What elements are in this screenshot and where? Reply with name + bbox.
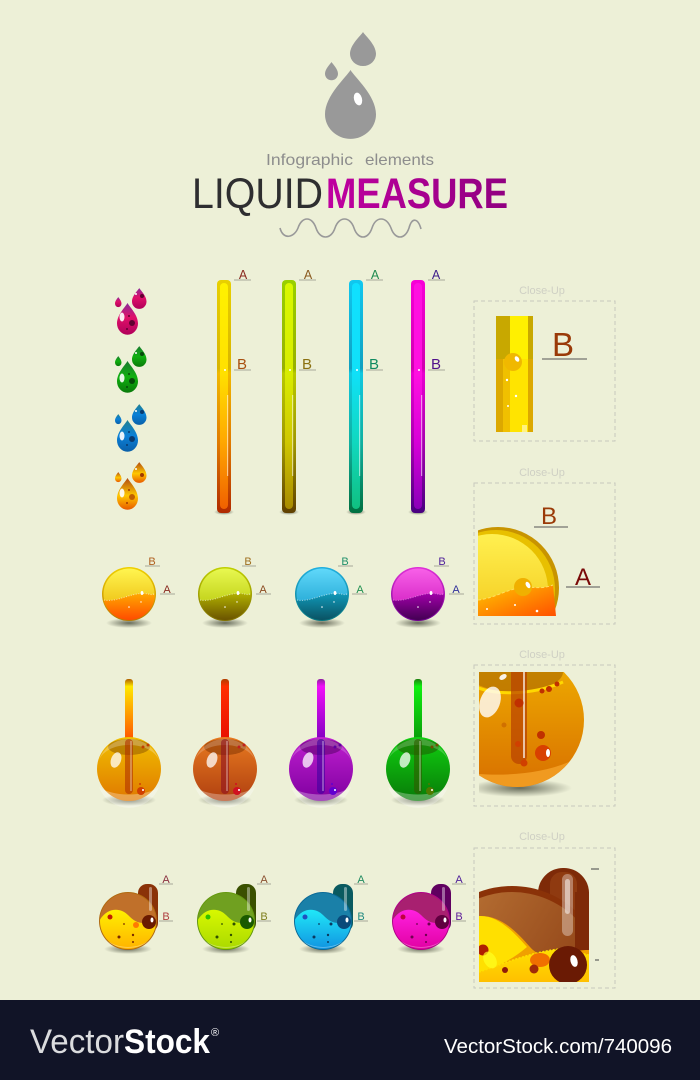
green drops [115,346,146,393]
sphere A and B labels, magenta: A [452,584,460,596]
flask labels, lime: B [260,911,268,923]
yellow sphere [102,567,156,628]
cyan tube: B [369,356,379,373]
sphere A and B labels, blue: A [356,584,364,596]
panel: close-up of tube [474,285,615,441]
lime tube: B [302,356,312,373]
sphere A and B labels, lime: A [259,584,267,596]
sphere A and B labels, magenta [434,556,464,596]
panel: close-up of sphere: A [575,564,591,591]
sphere A and B labels, yellow [145,556,175,596]
flask labels, orange: A [162,874,170,886]
yellow tube: B [237,356,247,373]
panel: close-up of tube: Close-Up [519,285,565,297]
panel: close-up of tube: B [552,326,574,363]
VectorStock logo: Vector [30,1023,124,1061]
VectorStock logo [30,1023,219,1061]
sphere A and B labels, yellow: A [163,584,171,596]
blue sphere [295,567,349,628]
flask labels, orange: B [162,911,170,923]
subtitle: elements [365,152,434,169]
amber stem sphere [97,679,161,808]
green stem sphere [386,679,450,808]
panel: close-up of flask: Close-Up [519,831,565,843]
title: MEASURE [326,170,508,218]
flask labels, lime: A [260,874,268,886]
panel: spheres with stems [97,679,450,808]
icon: grey water drops [325,32,376,139]
panel: flask spheres [98,874,466,954]
sphere A and B labels, magenta: B [438,556,446,568]
panel: close-up of sphere: Close-Up [519,467,565,479]
subtitle: Infographic [266,152,353,169]
panel: vertical tubes [214,268,445,515]
lime tube: A [304,268,313,282]
flask labels, magenta: B [455,911,463,923]
magenta tube: B [431,356,441,373]
title: LIQUID [192,170,323,218]
orange flask [98,884,158,954]
sphere A and B labels, lime: B [244,556,252,568]
sphere A and B labels, lime [242,556,271,596]
magenta sphere [391,567,445,628]
lime sphere [198,567,252,628]
panel: close-up of sphere: B [541,503,557,530]
sphere A and B labels, blue: B [341,556,349,568]
panel: close-up of flask [474,832,616,988]
panel: close-up of stem sphere [474,650,616,806]
flask labels, magenta: A [455,874,463,886]
header: logo and title [192,32,508,237]
blue drops [115,404,146,452]
footer bar [0,1000,700,1080]
cyan tube [346,268,383,515]
lime tube [279,268,316,515]
sphere A and B labels, yellow: B [148,556,156,568]
flask labels, lime [257,874,271,923]
red stem sphere [193,679,257,808]
panel: coloured drops [115,288,146,510]
magenta drops [115,288,146,335]
yellow tube [214,268,251,515]
magenta tube: A [432,268,441,282]
lime flask [196,884,256,954]
image id: VectorStock.com/740096 [444,1036,672,1058]
orange drops [115,462,146,510]
VectorStock logo: ® [211,1027,219,1039]
cyan tube: A [371,268,380,282]
flask labels, orange [159,874,173,923]
flask labels, magenta [452,874,466,923]
VectorStock logo: Stock [124,1023,210,1061]
flask labels, blue: A [357,874,365,886]
flask labels, blue: B [357,911,365,923]
magenta tube [408,268,445,515]
magenta flask [391,884,451,954]
flask labels, blue [354,874,368,923]
wavy divider [280,219,421,237]
purple stem sphere [289,679,353,808]
panel: close-up of sphere [474,468,616,624]
sphere A and B labels, blue [338,556,367,596]
subtitle [266,152,434,169]
panel: close-up of stem sphere: Close-Up [519,649,565,661]
title [192,170,508,218]
blue flask [293,884,353,954]
panel: glass spheres [102,556,464,628]
yellow tube: A [239,268,248,282]
